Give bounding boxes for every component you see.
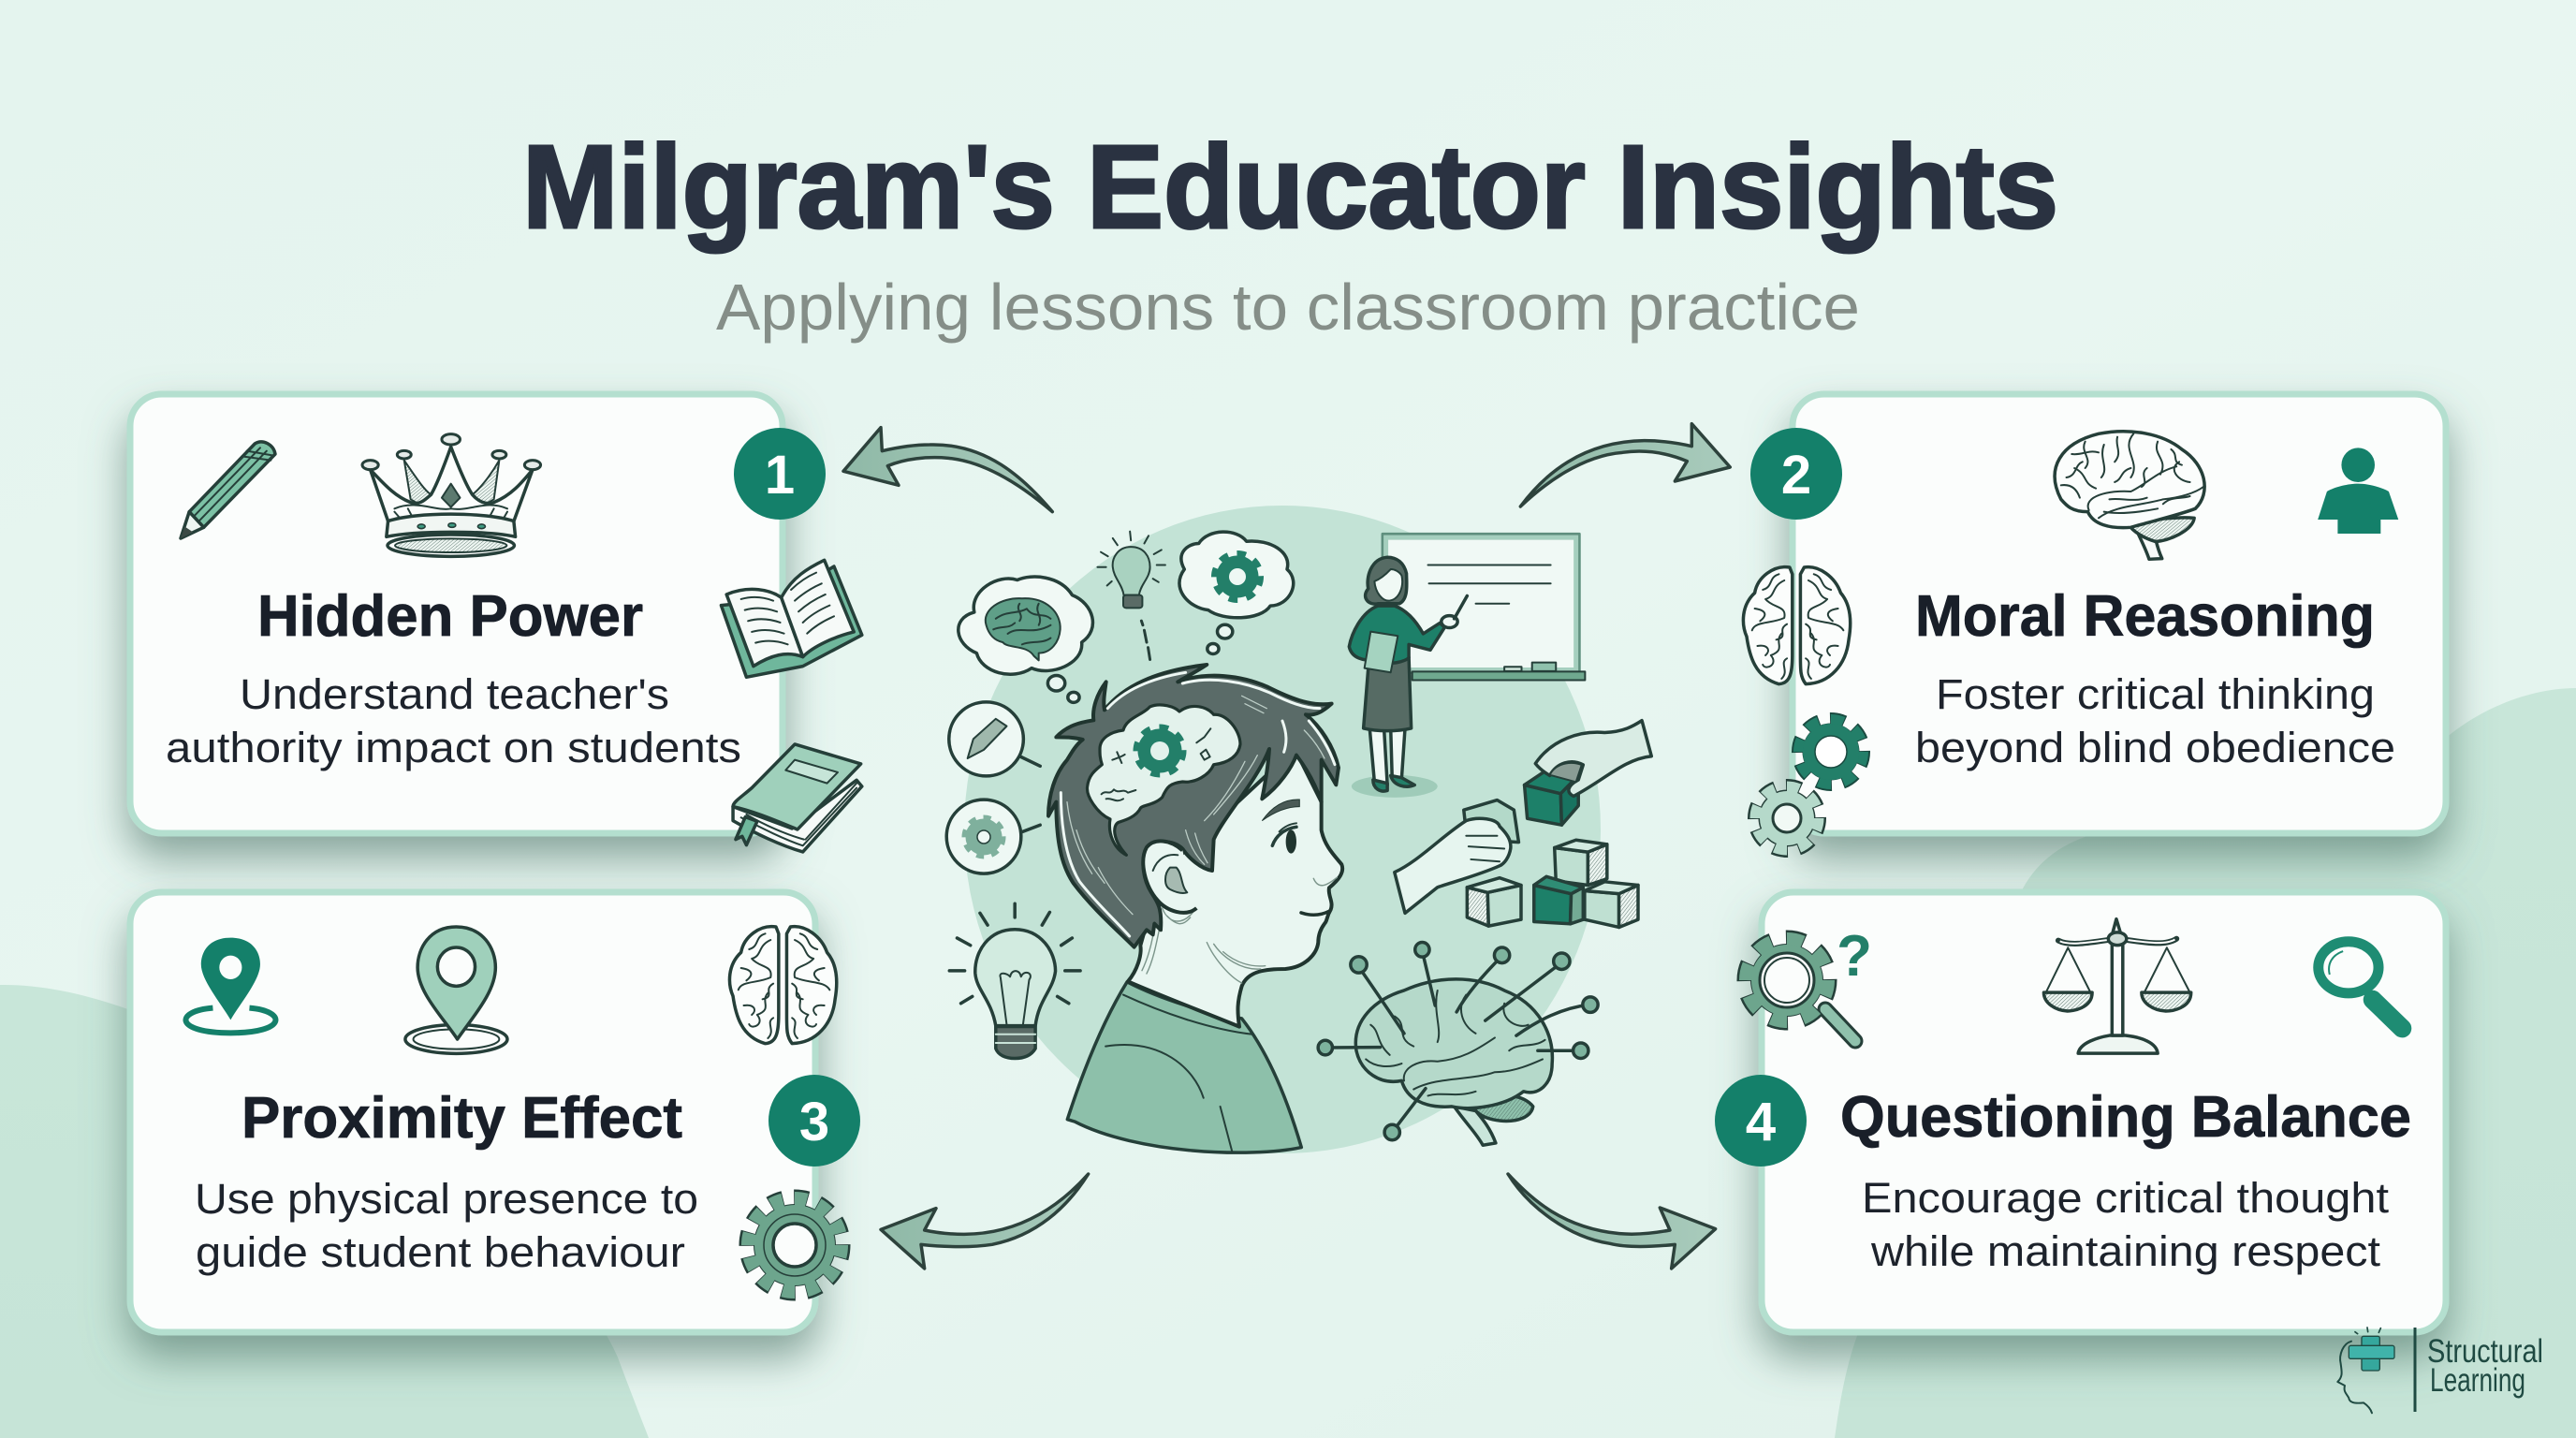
block C [1555,848,1588,885]
hair [1366,557,1407,604]
thought cloud with gear [1179,532,1294,653]
badge 3: 3 [799,1092,829,1152]
icon: gear bubble [946,800,1040,873]
description: while maintaining respect [1870,1227,2381,1275]
icon: closed book [733,744,862,852]
icon: pencil bubble [949,702,1040,776]
icon: large light bulb [949,903,1080,1059]
panel: Hidden Power [130,394,862,852]
description: authority impact on students [166,724,741,771]
heading: Moral Reasoning [1915,584,2375,649]
heading: Proximity Effect [242,1086,682,1151]
icon: green gear [749,1199,841,1291]
arrow: to Proximity Effect [881,1174,1089,1269]
description [166,670,741,771]
icon: solid pin [185,938,275,1033]
icon: crown [362,434,541,556]
hair [1048,665,1339,947]
brain thought [1088,705,1240,855]
lower hand [1395,818,1511,913]
icon: dark gear [1799,720,1863,784]
light cube in hand [1464,800,1518,843]
head and face [1048,665,1342,1027]
icon: gear with magnifier and question mark [1746,924,1872,1041]
shadow [1352,775,1438,798]
icon: open book [721,560,862,677]
body [1349,606,1444,663]
panel: Proximity Effect [130,892,860,1332]
icon: brain side view [2055,432,2204,559]
shirt [1067,982,1301,1152]
subtitle: Applying lessons to classroom practice [716,271,1860,344]
icon: gear in cloud [1216,555,1259,598]
badge 1 [734,428,826,520]
logo: Structural Learning: Learning [2430,1362,2525,1399]
green cube held [1525,785,1561,825]
description: Use physical presence to [195,1175,698,1223]
icon: brain top view [1743,567,1851,684]
badge 1: 1 [765,445,795,506]
description [1915,670,2395,771]
logo: Structural Learning [2337,1328,2543,1413]
block B [1534,885,1572,924]
upper hand [1535,721,1651,796]
whiteboard [1383,534,1579,672]
icon: head with puzzle cross [2337,1328,2394,1413]
description: Foster critical thinking [1936,670,2375,718]
heading: Hidden Power [257,584,643,649]
description: guide student behaviour [196,1228,685,1276]
panel: Questioning Balance [1715,892,2446,1332]
icon: magnifying glass [2319,942,2402,1028]
arrow: to Hidden Power [843,428,1052,512]
description: Understand teacher's [240,670,669,718]
background circle [964,506,1601,1153]
icon: networked brain [1318,943,1598,1145]
description: beyond blind obedience [1915,724,2395,771]
icon: outlined pin [405,927,507,1053]
figure: boy in profile [1048,665,1342,1152]
heading: Questioning Balance [1840,1085,2411,1150]
badge 3 [768,1075,860,1167]
thought cloud with brain [959,577,1092,702]
description [195,1175,698,1276]
icon: small light bulb [1097,532,1165,659]
logo: Structural Learning: Structural [2427,1333,2543,1370]
face details [1262,800,1299,821]
hand and pointer [1442,616,1457,627]
title: Milgram's Educator Insights [522,121,2058,253]
badge 2: 2 [1781,445,1811,506]
icon: gear in boy's head [1137,728,1182,773]
description: Encourage critical thought [1862,1174,2390,1222]
panel: Moral Reasoning [1743,394,2446,850]
icon: balance scale [2043,919,2191,1053]
central illustration [946,506,1651,1153]
badge 2 [1750,428,1842,520]
book [1365,632,1398,672]
icon: light gear [1755,786,1819,850]
legs [1369,728,1405,785]
hands and building blocks [1395,721,1651,927]
block D [1585,890,1619,927]
skirt [1364,657,1412,731]
icon: gear with magnifier and question mark: ? [1837,924,1872,989]
teacher at whiteboard [1349,534,1585,798]
description [1862,1174,2390,1275]
block A [1467,888,1488,926]
ear [1143,841,1196,913]
badge 4 [1715,1075,1807,1167]
arrow: to Questioning Balance [1508,1174,1716,1269]
badge 4: 4 [1746,1092,1776,1152]
arrow: to Moral Reasoning [1520,424,1730,506]
icon: brain top view [729,927,837,1044]
icon: pencil [181,442,275,538]
icon: person [2318,448,2398,534]
face [1374,569,1402,601]
